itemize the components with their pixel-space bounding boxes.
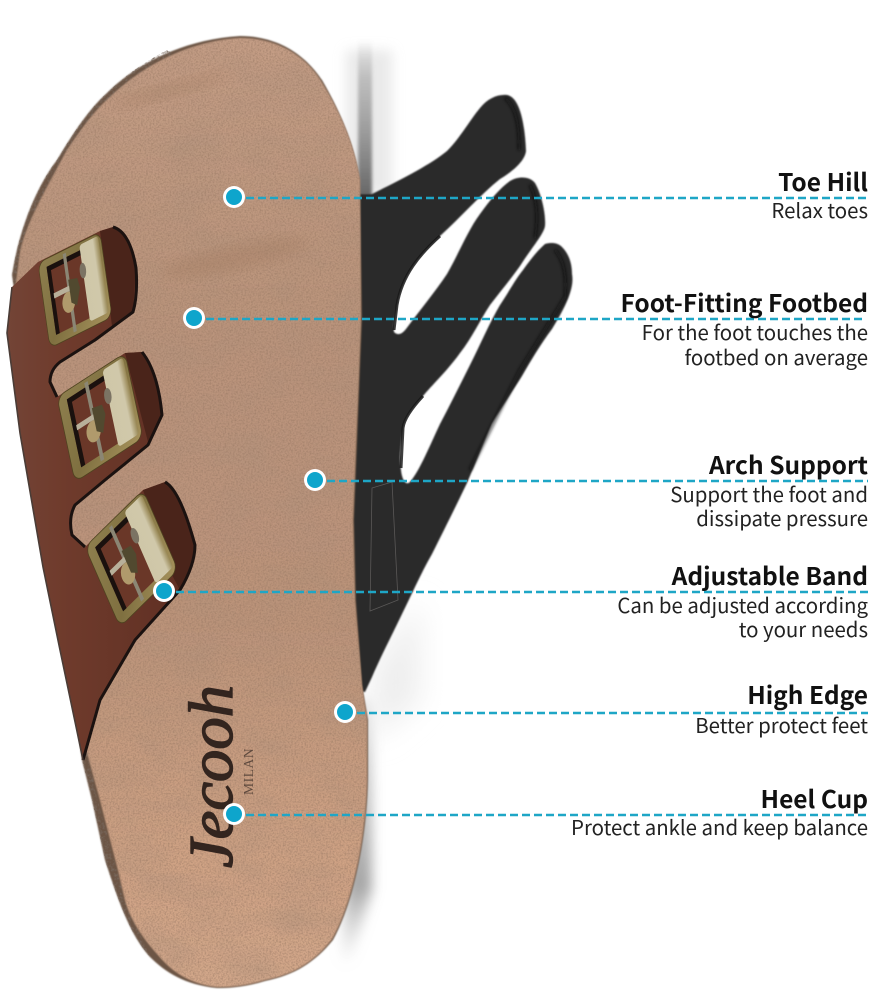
callout: Foot-Fitting Footbed: Foot-Fitting Footbed bbox=[621, 285, 868, 320]
callout: Toe Hill: Toe Hill bbox=[778, 164, 868, 199]
callout: High Edge: High Edge bbox=[747, 677, 868, 712]
sandal sole: cork rim bbox=[12, 36, 368, 988]
wall shadow: upper right of sole bbox=[340, 40, 420, 965]
black straps behind the sole bbox=[350, 95, 572, 692]
callout: Heel Cup bbox=[223, 781, 868, 841]
callout: Adjustable Band: Adjustable Band bbox=[671, 558, 868, 593]
callout: Adjustable Band: Can be adjusted according bbox=[617, 589, 868, 619]
buckle 2 bbox=[57, 353, 143, 482]
callout: Foot-Fitting Footbed bbox=[183, 285, 868, 371]
suede footbed bbox=[15, 38, 367, 987]
callout: Toe Hill bbox=[223, 164, 868, 224]
buckle 3 bbox=[85, 490, 178, 627]
brown leather strap base with slots bbox=[7, 227, 195, 760]
buckle 1 bbox=[38, 232, 112, 348]
callout: Toe Hill: Relax toes bbox=[771, 194, 868, 224]
callout: High Edge: Better protect feet bbox=[695, 709, 868, 739]
callout: Arch Support: Support the foot and bbox=[670, 478, 868, 508]
callout: Arch Support: dissipate pressure bbox=[696, 502, 868, 532]
callout: Arch Support bbox=[304, 447, 868, 532]
brand logo script: Jecooh bbox=[178, 685, 246, 868]
callout: High Edge bbox=[334, 677, 868, 739]
callout: Heel Cup: Heel Cup bbox=[761, 781, 868, 816]
callout: Foot-Fitting Footbed: For the foot touches the bbox=[642, 316, 868, 346]
brand sub-mark MILAN: MILAN bbox=[241, 748, 256, 795]
callout: Heel Cup: Protect ankle and keep balance bbox=[571, 811, 868, 841]
callout: Arch Support: Arch Support bbox=[708, 447, 868, 482]
callout: Adjustable Band bbox=[153, 558, 868, 643]
callout: Foot-Fitting Footbed: footbed on average bbox=[684, 341, 868, 371]
callout: Adjustable Band: to your needs bbox=[739, 613, 868, 643]
